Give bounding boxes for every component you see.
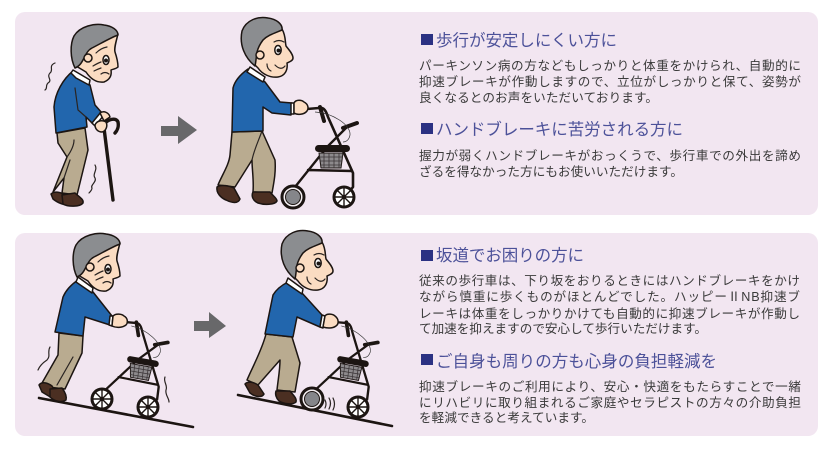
panel: top background — [15, 12, 818, 215]
body text: 握力が弱くハンドブレーキがおっくうで、歩行車での外出を諦め — [419, 148, 801, 163]
rollator — [301, 318, 380, 417]
hands and cuffs — [92, 112, 104, 126]
text block: slopes — [419, 246, 800, 336]
body text: を軽減できると考えています。 — [419, 410, 594, 425]
body text: ながら慎重に歩くものがほとんどでした。ハッピーⅡNB抑速ブ — [419, 289, 800, 304]
hand — [323, 314, 338, 328]
text block: hand brake — [419, 119, 801, 179]
body text — [419, 273, 800, 336]
body text: 抑速ブレーキが作動しますので、立位がしっかりと保て、姿勢が — [419, 74, 801, 89]
figure: worried man on slope — [38, 233, 193, 427]
body text: にリハビリに取り組まれるご家庭やセラピストの方々の介助負担 — [419, 395, 801, 410]
body text: パーキンソン病の方などもしっかりと体重をかけられ、自動的に — [419, 58, 801, 73]
hand — [294, 100, 308, 114]
body text: レーキは体重をしっかりかけても自動的に抑速ブレーキが作動し — [419, 306, 800, 321]
sweater — [55, 280, 112, 336]
heading: 坂道でお困りの方に — [436, 246, 584, 265]
heading: ハンドブレーキに苦労される方に — [436, 119, 683, 139]
head — [71, 24, 118, 82]
hand — [112, 314, 127, 327]
body text: 抑速ブレーキのご利用により、安心・快適をもたらすことで一緒 — [419, 379, 801, 394]
body text: て加速を抑えますので安心して歩行いただけます。 — [419, 322, 707, 336]
icon: wobble lines — [38, 347, 169, 402]
head — [281, 231, 333, 290]
shoes — [245, 382, 264, 397]
shoes — [39, 383, 58, 398]
rollator — [282, 107, 357, 208]
head — [241, 18, 293, 77]
body text — [419, 148, 801, 179]
body text — [419, 379, 801, 425]
sweater — [265, 282, 322, 337]
collar and cuff — [76, 277, 113, 326]
slope — [39, 398, 193, 427]
sweater — [232, 69, 292, 132]
body text — [419, 58, 801, 105]
collar — [71, 70, 90, 85]
sweater — [54, 71, 102, 133]
text block: stable walking — [419, 31, 801, 105]
body text: 従来の歩行車は、下り坂をおりるときにはハンドブレーキをかけ — [419, 273, 800, 288]
rollator — [92, 318, 170, 417]
icon: wobble lines — [45, 63, 96, 193]
shoes — [51, 192, 70, 205]
figure: stooped man with cane — [45, 24, 118, 206]
body text: ざるを得なかった方にもお使いいただけます。 — [419, 164, 683, 179]
arrow — [161, 116, 197, 144]
cane — [103, 119, 118, 200]
arrow — [194, 312, 226, 338]
arm line — [75, 88, 86, 117]
trousers — [218, 131, 275, 193]
text block: reducing burden — [419, 352, 801, 425]
figure: smiling man on slope with brake — [238, 231, 392, 426]
trousers — [247, 334, 300, 392]
body text: 良くなるとのお声をいただいております。 — [419, 90, 658, 105]
head — [73, 233, 120, 291]
slope — [238, 395, 392, 426]
trousers — [42, 333, 83, 389]
panel: bottom background — [15, 233, 818, 436]
collar and cuff — [247, 67, 294, 114]
figure: upright man with rollator — [217, 18, 357, 208]
icon: motion lines — [325, 398, 334, 410]
heading: ご自身も周りの方も心身の負担軽減を — [436, 352, 717, 371]
shoes — [217, 185, 240, 202]
collar and cuff — [286, 278, 325, 328]
heading: 歩行が安定しにくい方に — [436, 31, 617, 50]
trousers — [53, 128, 88, 195]
